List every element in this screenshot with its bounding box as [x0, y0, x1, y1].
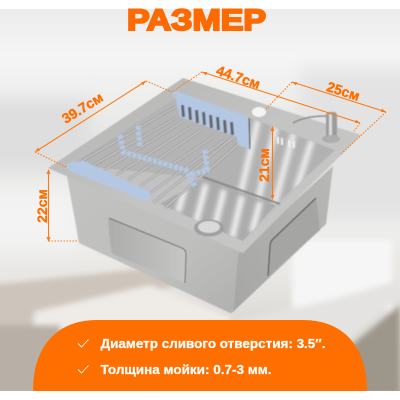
- title: РАЗМЕР: [127, 4, 266, 37]
- panel: specifications: [33, 320, 367, 391]
- drying rack: [67, 91, 250, 208]
- sink right wall: [233, 166, 333, 312]
- soap dispenser: [293, 112, 340, 143]
- dimension 44.7: 44.7см: [214, 62, 262, 92]
- rack blue chain: [120, 126, 207, 186]
- basin ledge rod: [203, 177, 280, 204]
- dimension 21: [256, 126, 274, 200]
- basin wall reflections: [240, 120, 312, 206]
- rack blue back panel: [172, 91, 250, 149]
- dimension 22: 22см: [34, 189, 50, 223]
- icon: check 2: [78, 366, 88, 373]
- dimension 25: [265, 78, 386, 155]
- rack rods: [82, 107, 242, 208]
- dimension 22: [34, 169, 78, 242]
- sink front wall: [67, 176, 243, 313]
- dimension 39.7: [35, 81, 172, 167]
- dimension 21: 21см: [256, 148, 272, 182]
- basin interior: [70, 98, 335, 242]
- basin floor reflections: [178, 178, 260, 238]
- text: drain diameter: Диаметр сливого отверстия: 3.5″.: [100, 336, 326, 351]
- sink: [48, 78, 361, 313]
- sink top deck: [48, 78, 361, 253]
- dimension 25: 25см: [325, 78, 362, 104]
- top white band: [0, 0, 400, 9]
- drain: [194, 220, 224, 236]
- wall markings: [278, 137, 294, 148]
- rack blue front handle: [67, 161, 150, 202]
- right side panel: [268, 198, 320, 276]
- dimension 39.7: 39.7см: [59, 89, 106, 127]
- dimension 44.7: [172, 62, 360, 131]
- text: sink thickness: Толщина мойки: 0.7-3 мм.: [100, 362, 272, 377]
- tap hole: [252, 107, 266, 117]
- left side panel: [108, 218, 186, 283]
- bottom white band: [0, 391, 400, 400]
- icon: check 1: [78, 340, 88, 347]
